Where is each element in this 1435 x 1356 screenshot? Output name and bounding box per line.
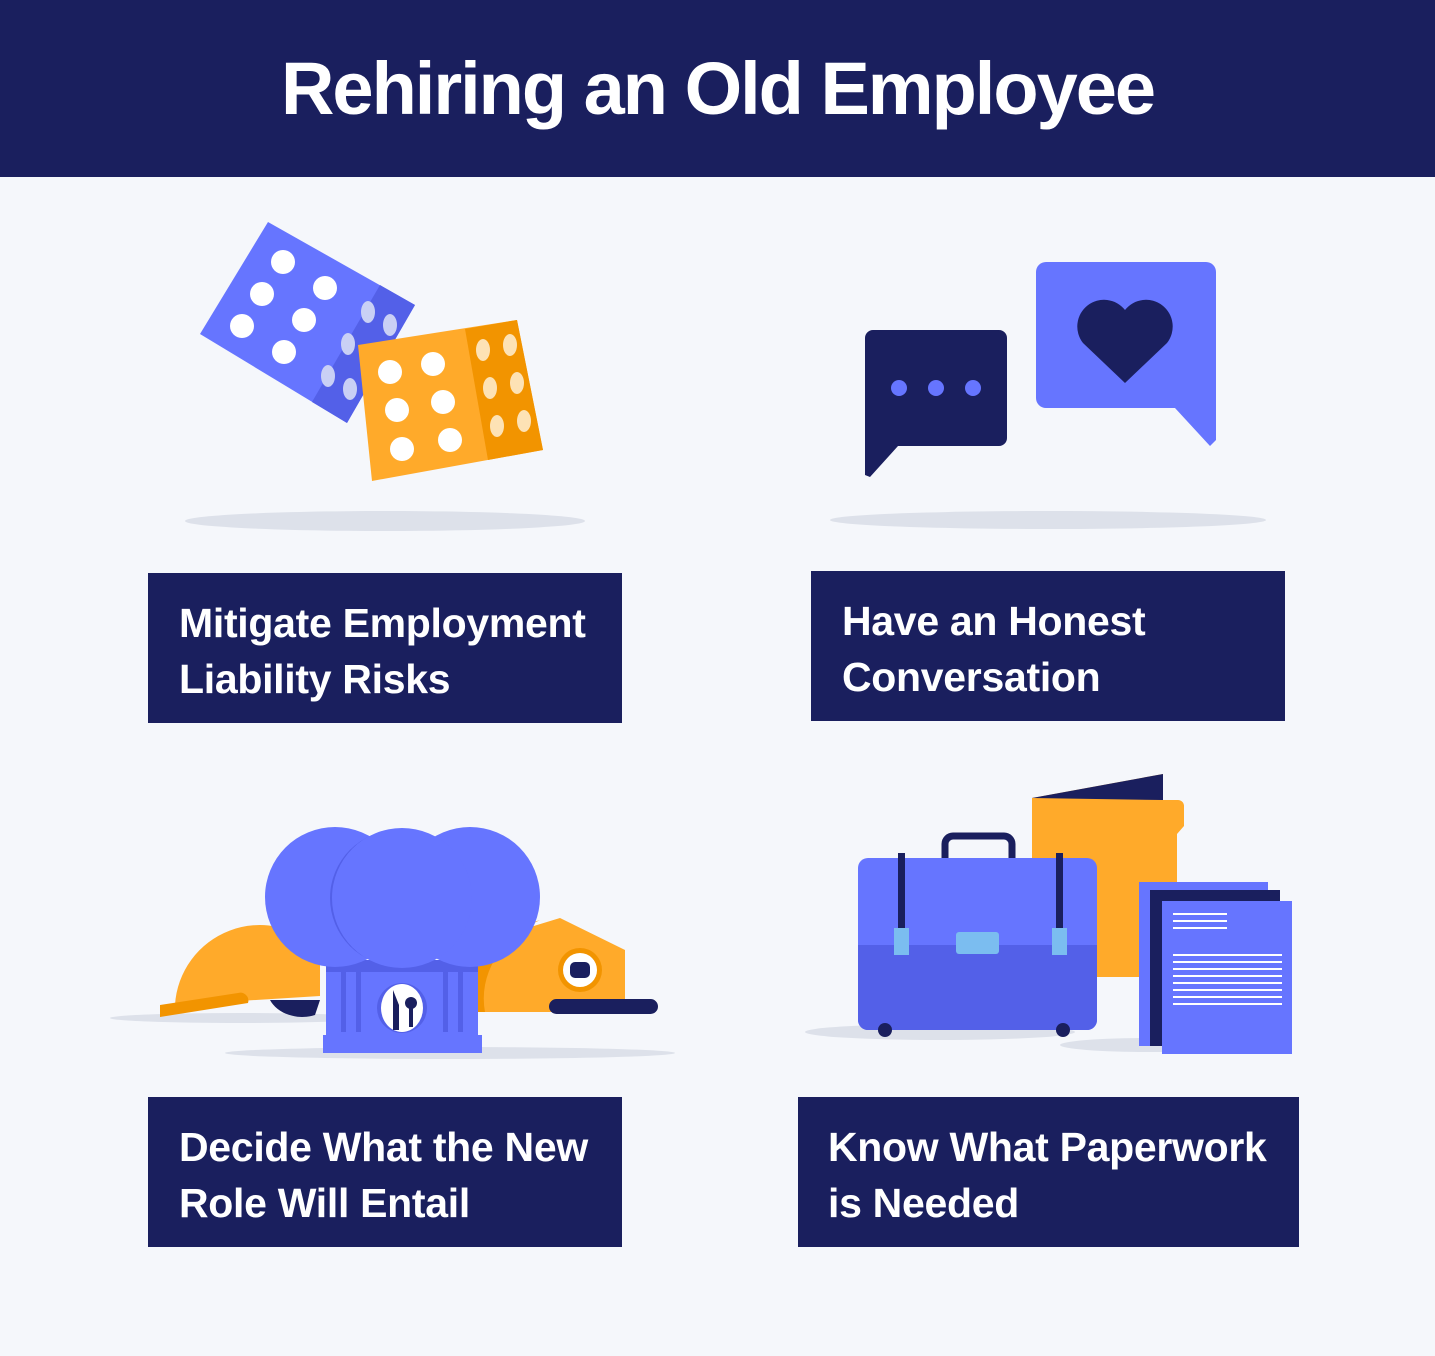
label: honest conversation: Have an Honest (842, 598, 1145, 644)
label: paperwork: Know What Paperwork (828, 1124, 1267, 1170)
icon: chat bubbles (830, 262, 1266, 529)
icon: pill blisters (185, 222, 585, 531)
label: new role (148, 1097, 622, 1247)
label: mitigate: Liability Risks (179, 656, 450, 702)
icon: briefcase and papers (805, 774, 1292, 1054)
label: honest conversation (811, 571, 1285, 721)
label: mitigate (148, 573, 622, 723)
icon: hats (110, 827, 675, 1059)
label: new role: Role Will Entail (179, 1180, 470, 1226)
label: paperwork: is Needed (828, 1180, 1019, 1226)
label: mitigate: Mitigate Employment (179, 600, 586, 646)
title (0, 0, 1435, 177)
label: new role: Decide What the New (179, 1124, 588, 1170)
label: honest conversation: Conversation (842, 654, 1100, 700)
label: paperwork (798, 1097, 1299, 1247)
title: Rehiring an Old Employee (281, 47, 1154, 130)
